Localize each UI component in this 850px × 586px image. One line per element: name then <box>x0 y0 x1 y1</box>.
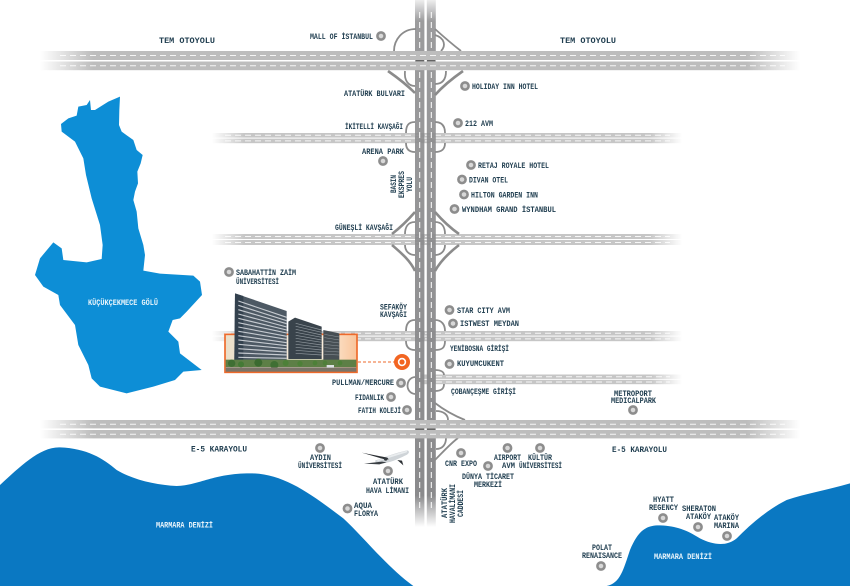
icon: project location marker <box>394 354 410 370</box>
expressway: Basın Ekspres Yolu <box>415 0 436 527</box>
label: Atatürk Havalimanı Caddesi: HAVALİMANI <box>448 484 458 523</box>
poi: Mall of Istanbul: MALL OF İSTANBUL <box>310 32 373 42</box>
poi: Arena Park <box>362 147 405 165</box>
poi: Aqua Florya: FLORYA <box>354 509 379 519</box>
poi: Ataköy Marina: ATAKÖY <box>714 512 740 523</box>
callout connector <box>358 361 394 363</box>
sea: Marmara left <box>0 447 413 586</box>
interchange ramps <box>388 29 465 460</box>
poi: Metroport Medicalpark: METROPORT <box>614 389 652 399</box>
road label: TEM right: TEM OTOYOLU <box>560 36 616 46</box>
label: Güneşli Kavşağı: GÜNEŞLİ KAVŞAĞI <box>335 222 393 233</box>
poi: Polat Renaissance: RENAISANCE <box>582 551 622 561</box>
icon: airplane <box>362 450 409 465</box>
lake: Küçükçekmece: KÜÇÜKÇEKMECE GÖLÜ <box>88 297 158 308</box>
label: Atatürk Havalimanı Caddesi: CADDESİ <box>456 490 466 517</box>
poi: 212 AVM: 212 AVM <box>465 119 493 129</box>
poi: Kuyumcukent: KUYUMCUKENT <box>457 359 504 369</box>
label: Basın Ekspres Yolu <box>389 171 415 198</box>
poi: Kültür Üniversitesi <box>519 444 562 471</box>
label: Atatürk Havalimanı Caddesi <box>439 484 466 523</box>
poi: Sabahattin Zaim Üniversitesi: ÜNİVERSİTESİ <box>236 276 279 287</box>
poi: Atatürk Hava Limanı: HAVA LİMANI <box>366 486 409 496</box>
poi: Holiday Inn <box>461 82 538 92</box>
sea: Marmara left: MARMARA DENİZİ <box>156 520 213 530</box>
poi: Retaj Royale: RETAJ ROYALE HOTEL <box>478 161 549 171</box>
project building image <box>225 293 357 372</box>
poi: Fidanlık: FIDANLIK <box>355 393 385 403</box>
poi: Polat Renaissance: POLAT <box>592 543 612 553</box>
poi: Aydın Üniversitesi <box>298 444 342 471</box>
poi: Kuyumcukent <box>446 359 504 369</box>
poi: Fatih Koleji: FATIH KOLEJİ <box>358 406 401 416</box>
poi: Star City AVM <box>446 306 510 316</box>
poi: Hyatt Regency <box>649 495 679 522</box>
sea: Marmara right: MARMARA DENİZİ <box>654 552 712 562</box>
secondary road: İkitelli <box>212 133 682 143</box>
poi: Polat Renaissance <box>582 543 622 570</box>
poi: Ataköy Marina <box>714 512 740 540</box>
poi: Wyndham Grand: WYNDHAM GRAND İSTANBUL <box>462 205 556 215</box>
road label: E-5 left: E-5 KARAYOLU <box>191 444 247 454</box>
secondary road: Sefaköy <box>212 331 682 341</box>
poi: Atatürk Hava Limanı <box>366 467 409 496</box>
road label: E-5 right: E-5 KARAYOLU <box>612 445 667 455</box>
poi: Aydın Üniversitesi: AYDIN <box>310 453 331 463</box>
highway: TEM <box>40 51 800 70</box>
poi: Metroport Medicalpark <box>611 389 657 414</box>
poi: Arena Park: ARENA PARK <box>362 147 405 157</box>
poi: Star City AVM: STAR CITY AVM <box>457 306 510 316</box>
label: Sefaköy Kavşağı <box>380 302 408 320</box>
poi: Pullman/Mercure: PULLMAN/MERCURE <box>332 378 394 388</box>
poi: Hyatt Regency: REGENCY <box>649 503 679 513</box>
poi: Hilton Garden Inn: HILTON GARDEN INN <box>471 190 538 200</box>
label: Sefaköy Kavşağı: SEFAKÖY <box>380 302 408 313</box>
label: Atatürk Bulvarı: ATATÜRK BULVARI <box>344 88 405 99</box>
secondary road: Güneşli <box>212 234 682 245</box>
poi: Dünya Ticaret Merkezi <box>462 462 514 490</box>
poi: Metroport Medicalpark: MEDICALPARK <box>611 396 657 406</box>
label: İkitelli Kavşağı: İKİTELLİ KAVŞAĞI <box>345 121 403 132</box>
poi: Kültür Üniversitesi: ÜNİVERSİTESİ <box>519 460 562 471</box>
poi: Atatürk Hava Limanı: ATATÜRK <box>373 476 404 487</box>
poi: Aydın Üniversitesi: ÜNİVERSİTESİ <box>298 460 342 471</box>
poi: Holiday Inn: HOLIDAY INN HOTEL <box>472 82 538 92</box>
poi: CNR Expo <box>445 449 477 469</box>
poi: CNR Expo: CNR EXPO <box>445 459 477 469</box>
poi: Sabahattin Zaim Üniversitesi <box>225 268 296 287</box>
poi: Dünya Ticaret Merkezi: DÜNYA TİCARET <box>462 471 514 482</box>
poi: Sabahattin Zaim Üniversitesi: SABAHATTİN ZAİM <box>236 268 296 278</box>
poi: Sheraton Ataköy: ATAKÖY <box>686 511 712 522</box>
poi: Aqua Florya: AQUA <box>354 501 373 511</box>
poi: Ataköy Marina: MARINA <box>714 521 740 531</box>
label: Basın Ekspres Yolu: YOLU <box>405 177 415 192</box>
poi: Airport AVM: AVM <box>502 461 515 471</box>
poi: Aqua Florya <box>344 501 379 519</box>
label: Atatürk Havalimanı Caddesi: ATATÜRK <box>439 487 450 518</box>
highway: E-5 <box>40 420 800 438</box>
poi: Retaj Royale <box>467 161 549 171</box>
lake: Küçükçekmece <box>35 97 202 393</box>
poi: Dünya Ticaret Merkezi: MERKEZİ <box>474 480 502 490</box>
poi: Hilton Garden Inn <box>460 190 538 200</box>
poi: Istwest Meydan: ISTWEST MEYDAN <box>460 319 519 329</box>
poi: Sheraton Ataköy <box>682 504 716 531</box>
poi: Hyatt Regency: HYATT <box>653 495 674 505</box>
label: Yenibosna Girişi: YENİBOSNA GİRİŞİ <box>450 344 509 354</box>
poi: Airport AVM <box>494 444 521 471</box>
poi: Sheraton Ataköy: SHERATON <box>682 504 716 514</box>
label: Basın Ekspres Yolu: EKSPRES <box>397 171 407 198</box>
label: Sefaköy Kavşağı: KAVŞAĞI <box>380 309 407 320</box>
label: Basın Ekspres Yolu: BASIN <box>389 175 399 193</box>
poi: Divan Otel: DIVAN OTEL <box>469 175 508 185</box>
road label: TEM left: TEM OTOYOLU <box>159 36 215 46</box>
poi: 212 AVM <box>454 119 493 129</box>
label: Çobançeşme Girişi: ÇOBANÇEŞME GİRİŞİ <box>451 387 516 397</box>
poi: Kültür Üniversitesi: KÜLTÜR <box>528 452 553 463</box>
poi: Divan Otel <box>458 175 508 185</box>
poi: Airport AVM: AIRPORT <box>494 453 521 463</box>
sea: Marmara right <box>607 483 850 586</box>
secondary road: Çobançeşme <box>415 374 682 384</box>
